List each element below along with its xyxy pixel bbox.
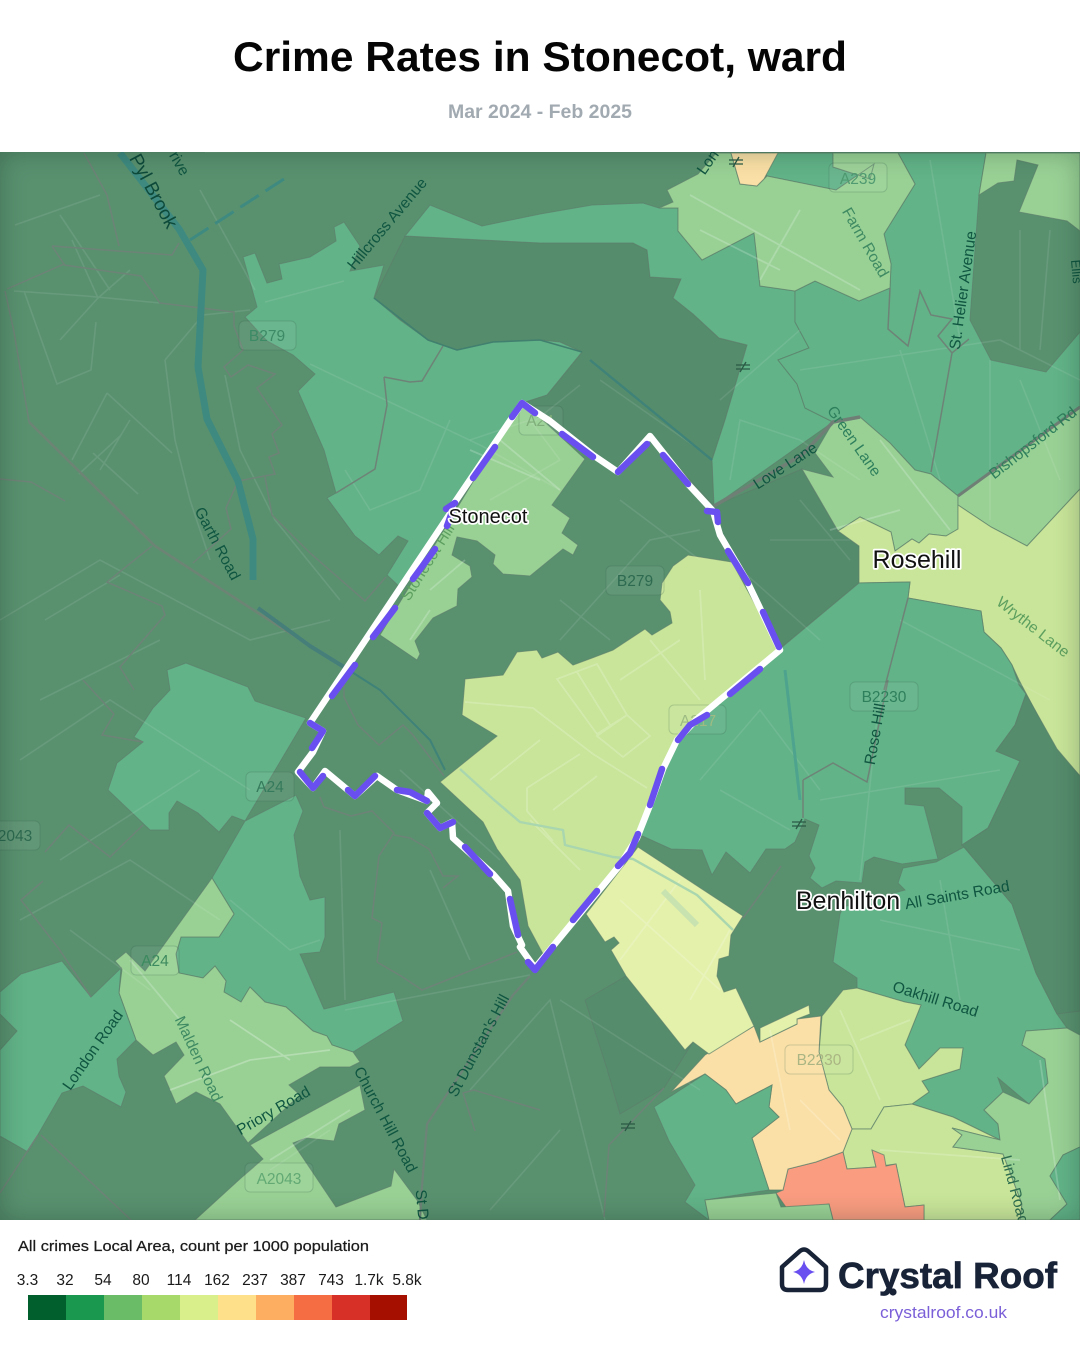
area: small top mid green: [767, 152, 856, 190]
darker area: north wedge: [374, 236, 747, 506]
title: Crime Rates in Stonecot, ward: [233, 33, 847, 80]
icon: house with star: [782, 1250, 826, 1290]
legend values: 743: [318, 1272, 344, 1289]
area: far-right dark strip: [962, 694, 1080, 1014]
choropleth map: [0, 147, 1080, 1226]
road number labels: B279: [617, 573, 653, 590]
ward boundary: Stonecot: [298, 403, 780, 970]
street name labels: Lon: [694, 147, 723, 178]
street name labels: Lind Road: [997, 1154, 1032, 1226]
street name labels: St. Helier Avenue: [947, 230, 980, 351]
street name labels: Green Lane: [823, 403, 884, 480]
road number labels: A217: [680, 713, 716, 730]
road number labels: [0, 171, 907, 1188]
logo keyhole on y: [889, 1288, 897, 1296]
boundary white line: [298, 403, 780, 968]
area: salmon high crime: [776, 1150, 924, 1220]
area: west mid green: [108, 663, 306, 832]
area: south-east corner mid green: [1050, 1147, 1080, 1220]
place label: Rosehill: Rosehill: [873, 546, 961, 574]
street name labels: St D: [412, 1189, 431, 1220]
area: pale yellow sliver: [760, 1005, 810, 1042]
street name labels: Priory Road: [234, 1083, 313, 1139]
area: Bishopsford light green: [958, 407, 1080, 546]
street name labels: St Dunstan's Hill: [445, 992, 513, 1100]
legend title: All crimes Local Area, count per 1000 population: [18, 1238, 369, 1255]
roads over light areas: [130, 195, 1060, 1200]
road shields: [0, 163, 918, 1192]
area: Priory Road light green: [195, 1085, 427, 1220]
road number labels: B2230: [797, 1052, 842, 1069]
area: ward south yellow green: [440, 555, 780, 954]
logo url: crystalroof.co.uk: [880, 1304, 1008, 1322]
rail station icons: [621, 157, 806, 1131]
road number labels: B2230: [862, 689, 907, 706]
road number labels: B279: [249, 328, 285, 345]
area: south-east light green: [952, 1028, 1080, 1220]
legend values: 237: [242, 1272, 268, 1289]
legend values: 3.3: [17, 1272, 38, 1289]
street name labels: Malden Road: [171, 1014, 225, 1104]
area: ward north light green: [380, 401, 585, 660]
road network: [0, 150, 1080, 1220]
legend values: 114: [167, 1272, 192, 1289]
street name labels: Oakhill Road: [890, 979, 980, 1021]
legend values: 387: [280, 1272, 306, 1289]
area: Green Lane light green: [802, 417, 958, 551]
area: London Road mid green: [0, 961, 136, 1152]
area: Farm Road light green: [659, 153, 915, 301]
street name labels: Stonecot Hill: [398, 521, 458, 604]
subtitle: date range: Mar 2024 - Feb 2025: [448, 102, 632, 123]
street name labels: All Saints Road: [904, 878, 1011, 913]
road number labels: A2043: [257, 1171, 301, 1188]
area: Malden Road light green: [115, 878, 360, 1143]
area: south centre mid green: [654, 1074, 779, 1220]
area: Oakhill yellow green: [819, 988, 963, 1129]
place label: Stonecot: Stonecot: [449, 506, 528, 528]
ward and boundary lines: [0, 153, 1080, 1220]
street name labels: Rose Hill: [862, 702, 889, 766]
area: south yellow green: [843, 1104, 1022, 1220]
logo: Crystal Roof: [782, 1250, 1058, 1322]
street name labels: Hillcross Avenue: [344, 175, 431, 273]
road number labels: A24: [141, 953, 169, 970]
area: north-east mid green: [778, 153, 1080, 496]
legend values: 80: [132, 1272, 150, 1289]
legend values: 162: [204, 1272, 230, 1289]
street name labels: Pyl Brook: [124, 151, 181, 233]
legend values: 1.7k: [354, 1272, 384, 1289]
street name labels: Farm Road: [838, 205, 892, 281]
area: pale yellow south of ward: [586, 847, 754, 1054]
area: north-west mid green: [243, 222, 582, 590]
street name labels: Church Hill Road: [350, 1064, 420, 1176]
area: east mid green: [640, 582, 1026, 888]
street name labels: rive: [165, 149, 193, 179]
street name labels: [60, 147, 1080, 1226]
area: tan Sutton centre: [671, 1016, 852, 1190]
road number labels: A24: [526, 413, 554, 430]
boundary purple dashes: [300, 403, 779, 970]
area: tan top sliver: [731, 153, 778, 186]
legend values: 54: [94, 1272, 112, 1289]
legend values: 5.8k: [392, 1272, 422, 1289]
area: northern mid green strip: [405, 203, 833, 506]
legend values: 32: [56, 1272, 74, 1289]
street name labels: Love Lane: [751, 439, 821, 493]
street name labels: Bishopsford Rd: [986, 404, 1080, 483]
area: top right light green: [979, 153, 1080, 231]
darker area: east of ward: [714, 469, 839, 532]
area: A24 corridor mid green: [176, 795, 403, 1052]
darker area: south station: [585, 976, 693, 1114]
road number labels: A24: [256, 779, 284, 796]
Pyl Brook water course: [120, 153, 800, 930]
legend colour scale: [28, 1295, 407, 1320]
street name labels: London Road: [60, 1007, 127, 1093]
street name labels: Garth Road: [191, 505, 243, 583]
road number labels: A239: [840, 171, 876, 188]
map base: lowest crime areas: [0, 152, 1080, 1220]
place label: Benhilton: Benhilton: [796, 887, 900, 915]
legend: [17, 1238, 422, 1320]
logo wordmark: Crystal Roof: [838, 1255, 1058, 1296]
area: All Saints mid green: [833, 847, 1067, 1140]
area: Rosehill yellow green: [838, 489, 1080, 776]
street name labels: Wrythe Lane: [993, 594, 1073, 661]
legend values: [17, 1272, 422, 1289]
area: south light green: [705, 1193, 833, 1220]
